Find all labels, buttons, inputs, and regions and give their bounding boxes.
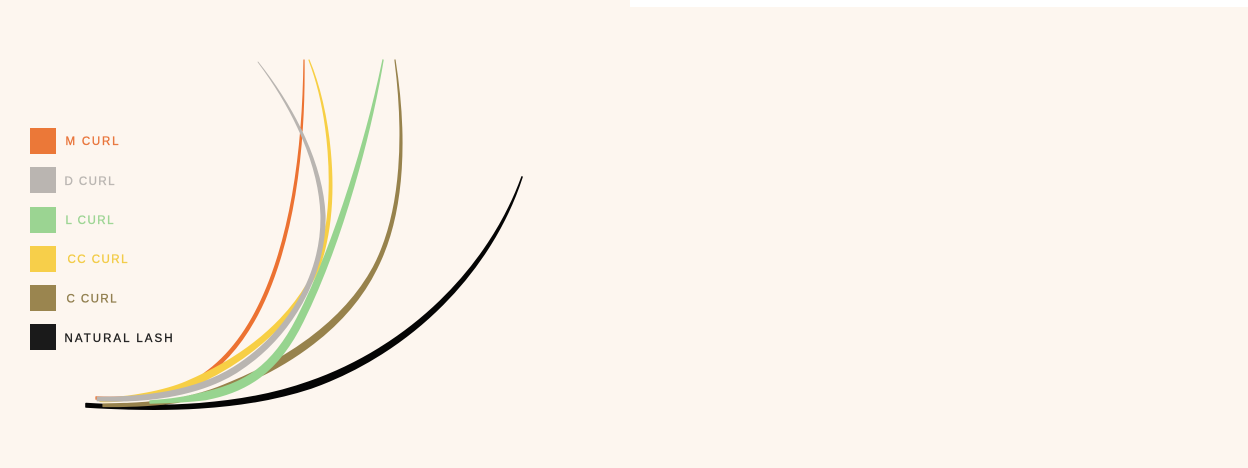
legend item: D curl: D CURL — [64, 176, 115, 188]
legend item: M curl — [30, 128, 119, 154]
legend item: L curl — [30, 207, 114, 233]
curve: M curl — [96, 60, 304, 400]
legend item: natural lash: NATURAL LASH — [64, 333, 172, 345]
legend item: D curl — [30, 167, 115, 193]
curve: CC curl — [100, 60, 332, 402]
legend item: natural lash — [30, 324, 172, 350]
legend item: C curl — [30, 285, 117, 311]
legend item: CC curl — [30, 246, 128, 272]
curve: C curl — [103, 60, 402, 407]
legend item: M curl: M CURL — [66, 136, 119, 148]
curve: natural lash — [86, 177, 522, 409]
legend — [30, 128, 172, 350]
legend item: L curl: L CURL — [66, 215, 114, 227]
legend item: C curl: C CURL — [66, 294, 117, 306]
legend item: CC curl: CC CURL — [68, 254, 128, 266]
chart: lash curl curves — [86, 60, 522, 409]
curve: D curl — [97, 62, 325, 401]
curve: L curl — [150, 60, 383, 403]
